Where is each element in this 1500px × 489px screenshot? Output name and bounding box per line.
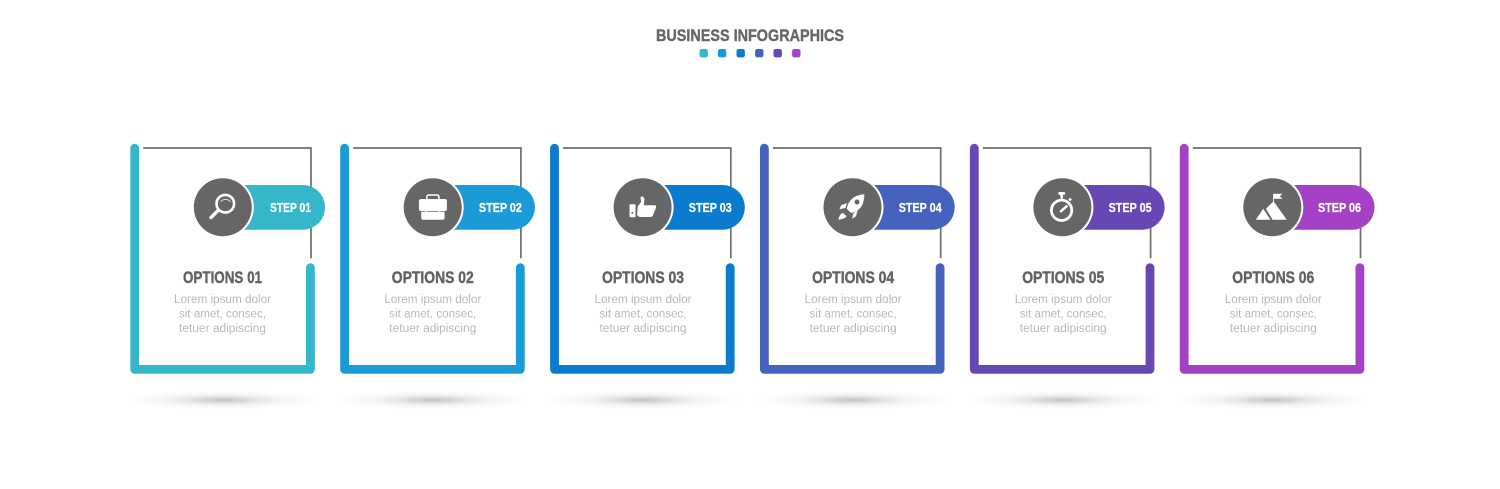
thick frame 03 bbox=[554, 148, 730, 369]
thin frame 04 bbox=[773, 148, 941, 258]
shadow 02 bbox=[337, 390, 529, 410]
body text 04: sit amet, consec, bbox=[810, 308, 897, 320]
body text 05: Lorem ipsum dolor bbox=[1015, 294, 1112, 306]
shadow 06 bbox=[1176, 390, 1368, 410]
body text 05 bbox=[1015, 294, 1112, 335]
thick frame 05 bbox=[974, 148, 1150, 369]
shadow 05 bbox=[967, 390, 1159, 410]
body text 01: sit amet, consec, bbox=[179, 308, 266, 320]
step tab 02 bbox=[450, 185, 535, 230]
icon: rocket 04 bbox=[822, 176, 884, 238]
body text 01: Lorem ipsum dolor bbox=[174, 294, 271, 306]
panel: step 01 bbox=[127, 148, 325, 410]
step tab 03: STEP 03 bbox=[689, 201, 732, 215]
panel: step 02 bbox=[337, 148, 535, 410]
step tab 01 bbox=[240, 185, 325, 230]
step tab 04: STEP 04 bbox=[899, 201, 942, 215]
shadow 04 bbox=[757, 390, 949, 410]
body text 03: sit amet, consec, bbox=[599, 308, 686, 320]
thick frame 01 bbox=[135, 148, 310, 369]
thick frame 06 bbox=[1184, 148, 1360, 369]
body text 05: sit amet, consec, bbox=[1020, 308, 1107, 320]
panel: step 03 bbox=[547, 148, 745, 410]
heading 05: OPTIONS 05 bbox=[1022, 269, 1104, 287]
heading 06: OPTIONS 06 bbox=[1232, 269, 1314, 287]
panel: step 04 bbox=[757, 148, 955, 410]
icon: thumbs up 03 bbox=[612, 176, 674, 238]
body text 02: Lorem ipsum dolor bbox=[384, 294, 481, 306]
thin frame 02 bbox=[353, 148, 521, 258]
title colour dots bbox=[700, 49, 800, 57]
thick frame 04 bbox=[764, 148, 940, 369]
body text 01: tetuer adipiscing bbox=[179, 323, 266, 335]
step tab 06: STEP 06 bbox=[1318, 201, 1361, 215]
panel: step 06 bbox=[1176, 148, 1375, 410]
icon: briefcase 02 bbox=[402, 176, 464, 238]
body text 06: sit amet, consec, bbox=[1230, 308, 1317, 320]
step tab 06 bbox=[1290, 185, 1375, 230]
body text 05: tetuer adipiscing bbox=[1020, 323, 1107, 335]
step tab 02: STEP 02 bbox=[479, 201, 522, 215]
step tab 04 bbox=[870, 185, 955, 230]
thin frame 01 bbox=[143, 148, 311, 258]
body text 04: Lorem ipsum dolor bbox=[805, 294, 902, 306]
icon: magnifying glass 01 bbox=[192, 176, 254, 238]
body text 04 bbox=[805, 294, 902, 335]
heading 04: OPTIONS 04 bbox=[812, 269, 895, 287]
heading 01: OPTIONS 01 bbox=[183, 269, 262, 287]
title: BUSINESS INFOGRAPHICS bbox=[656, 26, 844, 45]
thin frame 06 bbox=[1193, 148, 1360, 258]
body text 03 bbox=[594, 294, 692, 335]
body text 02 bbox=[384, 294, 481, 335]
body text 06 bbox=[1225, 294, 1322, 335]
thick frame 02 bbox=[345, 148, 520, 369]
body text 02: tetuer adipiscing bbox=[389, 323, 476, 335]
body text 06: tetuer adipiscing bbox=[1230, 323, 1317, 335]
body text 03: tetuer adipiscing bbox=[599, 323, 686, 335]
shadow 01 bbox=[127, 390, 319, 410]
body text 03: Lorem ipsum dolor bbox=[594, 294, 692, 306]
icon: stopwatch 05 bbox=[1031, 176, 1093, 238]
heading 02: OPTIONS 02 bbox=[392, 269, 474, 287]
step tab 01: STEP 01 bbox=[270, 201, 311, 215]
body text 01 bbox=[174, 294, 271, 335]
thin frame 03 bbox=[563, 148, 731, 258]
shadow 03 bbox=[547, 390, 739, 410]
step tab 05: STEP 05 bbox=[1109, 201, 1152, 215]
body text 04: tetuer adipiscing bbox=[810, 323, 897, 335]
step tab 05 bbox=[1080, 185, 1165, 230]
step tab 03 bbox=[660, 185, 745, 230]
heading 03: OPTIONS 03 bbox=[602, 269, 684, 287]
thin frame 05 bbox=[983, 148, 1151, 258]
panel: step 05 bbox=[967, 148, 1165, 410]
body text 02: sit amet, consec, bbox=[389, 308, 476, 320]
icon: mountain flag 06 bbox=[1241, 176, 1303, 238]
body text 06: Lorem ipsum dolor bbox=[1225, 294, 1322, 306]
